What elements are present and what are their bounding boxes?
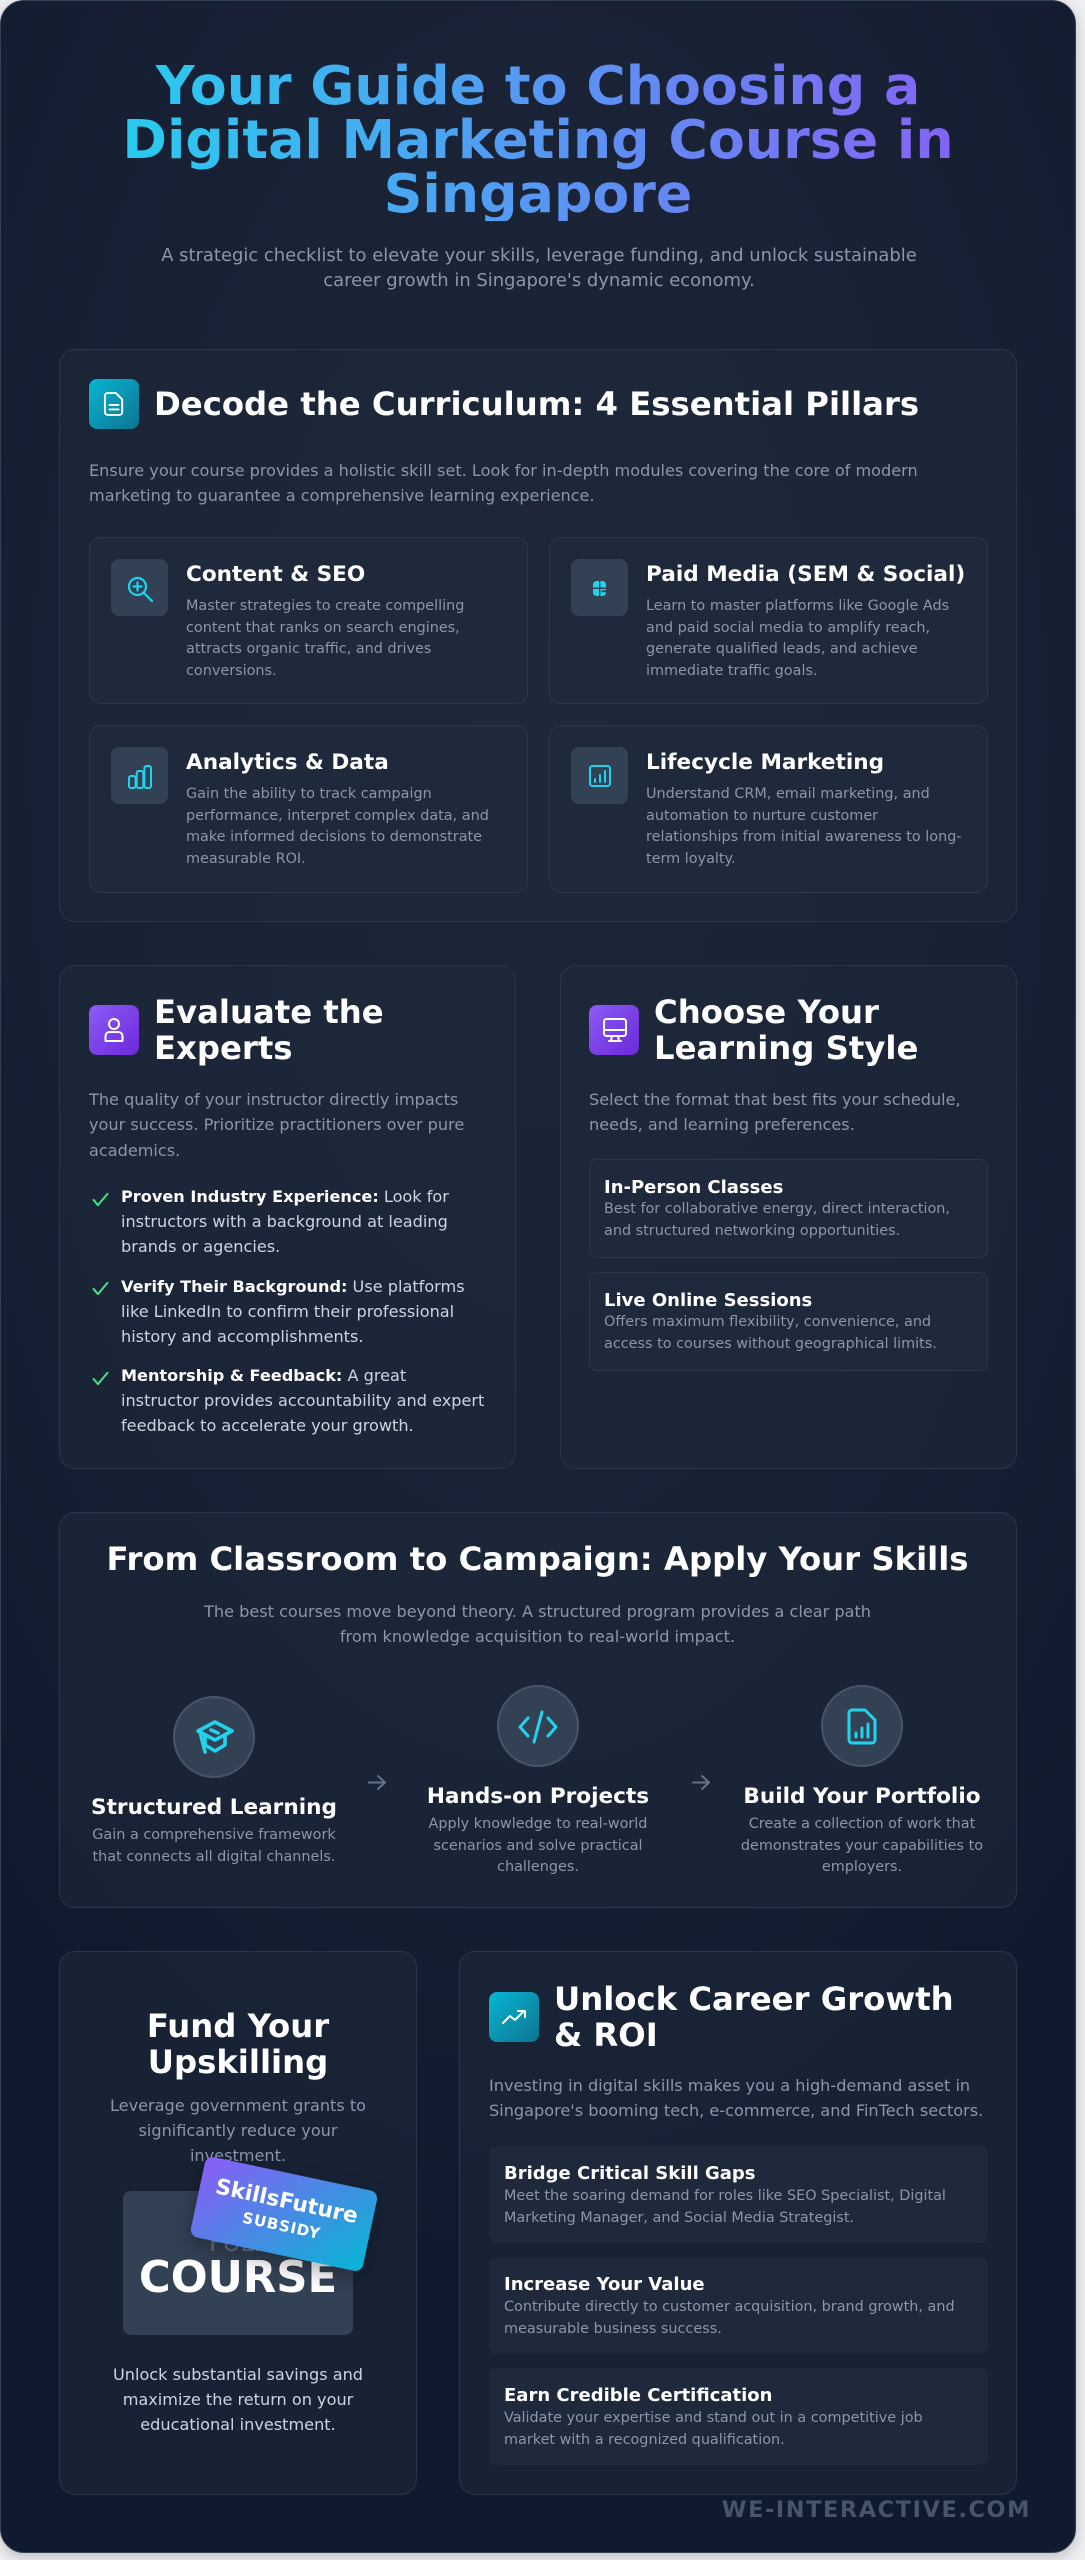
card text: earn credible certification: Validate your expertise and stand out in a competitive job xyxy=(504,2410,923,2426)
card text: analytics and data: measurable ROI. xyxy=(186,851,306,867)
card: earn credible certification xyxy=(489,2368,988,2465)
item: mentorship xyxy=(121,1366,484,1435)
item: verify background: history and accomplishments. xyxy=(121,1327,364,1346)
card text: paid media: generate qualified leads, and achieve xyxy=(646,641,918,657)
title: Your Guide to Choosing a xyxy=(156,54,920,117)
heading: career growth: & ROI xyxy=(554,2016,658,2054)
label: course: COURSE xyxy=(139,2253,337,2303)
text: funding outro: educational investment. xyxy=(140,2415,336,2434)
card text: live online sessions xyxy=(604,1314,937,1352)
icon: graduation cap xyxy=(173,1696,255,1778)
card text: bridge skill gaps xyxy=(504,2188,946,2226)
checklist: expert criteria xyxy=(92,1187,484,1435)
panel: learning style xyxy=(560,965,1017,1469)
card title: paid media: Paid Media (SEM & Social) xyxy=(646,562,965,587)
text: funding intro: significantly reduce your xyxy=(138,2121,338,2140)
text: career intro xyxy=(489,2076,983,2120)
text: funding intro: Leverage government grants to xyxy=(110,2096,366,2115)
step text xyxy=(741,1816,983,1875)
text: funding outro xyxy=(113,2365,363,2434)
icon: code xyxy=(497,1685,579,1767)
text: learning style intro: needs, and learning preferences. xyxy=(589,1115,855,1134)
text: learning style intro: Select the format that best fits your schedule, xyxy=(589,1090,961,1109)
card text: content and SEO: Master strategies to create compelling xyxy=(186,598,464,614)
text: experts intro: your success. Prioritize practitioners over pure xyxy=(89,1115,464,1134)
item: proven experience: brands or agencies. xyxy=(121,1237,280,1256)
icon: search plus xyxy=(111,559,168,616)
title: Digital Marketing Course in xyxy=(122,108,954,171)
step text: demonstrates your capabilities to xyxy=(741,1838,983,1854)
heading: career growth xyxy=(554,1980,954,2054)
item: proven experience: instructors with a background at leading xyxy=(121,1212,448,1231)
card text: lifecycle marketing xyxy=(646,786,962,867)
card text: in-person classes: Best for collaborative energy, direct interaction, xyxy=(604,1201,950,1217)
text: learning style intro xyxy=(589,1090,961,1134)
card title: lifecycle marketing: Lifecycle Marketing xyxy=(646,750,884,775)
card: analytics and data xyxy=(89,725,528,893)
heading: learning style: Choose Your xyxy=(654,993,879,1031)
text: experts intro: The quality of your instructor directly impacts xyxy=(89,1090,458,1109)
text: curriculum intro: Ensure your course provides a holistic skill set. Look for in-depth modules covering the core of modern xyxy=(89,461,918,480)
card text: increase your value: measurable business success. xyxy=(504,2321,722,2337)
arrow: step one to two xyxy=(368,1775,386,1790)
card text: live online sessions: Offers maximum flexibility, convenience, and xyxy=(604,1314,931,1330)
step title: Build Your Portfolio xyxy=(743,1784,981,1809)
card title: increase your value: Increase Your Value xyxy=(504,2274,705,2295)
card text: increase your value: Contribute directly to customer acquisition, brand growth, and xyxy=(504,2299,955,2315)
panel: evaluate the experts xyxy=(59,965,516,1469)
check: verify background xyxy=(92,1282,108,1296)
card: live online sessions xyxy=(589,1272,988,1371)
icon: bars xyxy=(111,747,168,804)
card text: analytics and data xyxy=(186,786,489,867)
card text: paid media xyxy=(646,598,949,679)
panel: curriculum pillars xyxy=(59,349,1017,922)
step text xyxy=(92,1827,336,1865)
text: funding outro: Unlock substantial savings and xyxy=(113,2365,363,2384)
subtitle: career growth in Singapore's dynamic economy. xyxy=(323,270,755,291)
text: funding intro xyxy=(110,2096,366,2165)
card text: lifecycle marketing: relationships from initial awareness to long- xyxy=(646,829,962,845)
title: Singapore xyxy=(384,162,692,225)
text: apply intro: from knowledge acquisition to real-world impact. xyxy=(340,1627,735,1646)
item: proven experience xyxy=(121,1187,449,1256)
text: funding intro: investment. xyxy=(190,2146,286,2165)
badge subtitle: SUBSIDY xyxy=(241,2209,322,2243)
item: verify background: Verify Their Background: Use platforms xyxy=(121,1277,465,1296)
heading: evaluate the experts: Experts xyxy=(154,1029,293,1067)
icon: trending up xyxy=(489,1992,539,2042)
text: experts intro: academics. xyxy=(89,1141,180,1160)
card text: bridge skill gaps: Marketing Manager, and Social Media Strategist. xyxy=(504,2210,854,2226)
badge title: SkillsFuture xyxy=(213,2174,360,2229)
card: content and SEO xyxy=(89,537,528,704)
text: funding outro: maximize the return on your xyxy=(123,2390,353,2409)
heading: decode the curriculum: Decode the Curriculum: 4 Essential Pillars xyxy=(154,385,919,423)
card title: content and SEO: Content & SEO xyxy=(186,562,365,587)
card text: earn credible certification: market with a recognized qualification. xyxy=(504,2432,785,2448)
icon: monitor xyxy=(589,1005,639,1055)
text: career intro: Singapore's booming tech, e-commerce, and FinTech sectors. xyxy=(489,2101,983,2120)
panel: fund your upskilling xyxy=(59,1951,417,2495)
text: apply intro xyxy=(204,1602,871,1646)
step text: scenarios and solve practical xyxy=(433,1838,643,1854)
card text: lifecycle marketing: term loyalty. xyxy=(646,851,736,867)
label: full: FULL xyxy=(209,2229,267,2257)
text: career intro: Investing in digital skills makes you a high-demand asset in xyxy=(489,2076,970,2095)
card title: live online sessions: Live Online Sessions xyxy=(604,1290,812,1311)
item: mentorship: feedback to accelerate your growth. xyxy=(121,1416,414,1435)
card text: content and SEO: conversions. xyxy=(186,663,277,679)
subsidy badge xyxy=(189,2156,379,2272)
step text: Gain a comprehensive framework xyxy=(92,1827,336,1843)
card text: lifecycle marketing: Understand CRM, email marketing, and xyxy=(646,786,930,802)
item: verify background xyxy=(121,1277,465,1346)
step text: challenges. xyxy=(497,1859,579,1875)
card text: analytics and data: performance, interpret complex data, and xyxy=(186,808,489,824)
heading: career growth: Unlock Career Growth xyxy=(554,1980,954,2018)
card text: bridge skill gaps: Meet the soaring demand for roles like SEO Specialist, Digital xyxy=(504,2188,946,2204)
check: mentorship xyxy=(92,1372,108,1386)
watermark: WE-INTERACTIVE.COM xyxy=(722,2497,1031,2523)
heading: fund your upskilling xyxy=(147,2007,330,2081)
icon: document xyxy=(89,379,139,429)
card text: content and SEO: content that ranks on search engines, xyxy=(186,620,460,636)
icon: paid media xyxy=(571,559,628,616)
text: curriculum intro: marketing to guarantee a comprehensive learning experience. xyxy=(89,486,595,505)
icon: file chart xyxy=(821,1685,903,1767)
step: hands-on projects xyxy=(427,1685,649,1875)
heading: evaluate the experts: Evaluate the xyxy=(154,993,384,1031)
card text: content and SEO: attracts organic traffic, and drives xyxy=(186,641,431,657)
card: paid media xyxy=(549,537,988,704)
card text: paid media: and paid social media to amplify reach, xyxy=(646,620,930,636)
course box xyxy=(123,2191,353,2335)
icon: chart square xyxy=(571,747,628,804)
card title: bridge skill gaps: Bridge Critical Skill Gaps xyxy=(504,2163,756,2184)
card: bridge skill gaps xyxy=(489,2146,988,2243)
card title: earn credible certification: Earn Credible Certification xyxy=(504,2385,772,2406)
step text xyxy=(428,1816,647,1875)
title xyxy=(60,59,1016,221)
step text: employers. xyxy=(822,1859,902,1875)
card text: increase your value xyxy=(504,2299,955,2337)
heading: fund your upskilling: Upskilling xyxy=(148,2043,328,2081)
card text: earn credible certification xyxy=(504,2410,923,2448)
panel: career growth and ROI xyxy=(459,1951,1017,2495)
item: verify background: like LinkedIn to confirm their professional xyxy=(121,1302,454,1321)
card title: analytics and data: Analytics & Data xyxy=(186,750,389,775)
check: proven experience xyxy=(92,1192,108,1206)
item: proven experience: Proven Industry Experience: Look for xyxy=(121,1187,449,1206)
arrow: step two to three xyxy=(692,1775,710,1790)
heading: fund your upskilling: Fund Your xyxy=(147,2007,329,2045)
card text: in-person classes xyxy=(604,1201,950,1239)
text: curriculum intro xyxy=(89,461,918,505)
card: in-person classes xyxy=(589,1159,988,1258)
card text: paid media: Learn to master platforms like Google Ads xyxy=(646,598,949,614)
step: structured learning xyxy=(91,1696,337,1865)
subtitle xyxy=(161,245,917,291)
card title: in-person classes: In-Person Classes xyxy=(604,1177,783,1198)
step: build your portfolio xyxy=(741,1685,983,1875)
graphic: course price with subsidy badge xyxy=(123,2157,378,2335)
heading: learning style: Learning Style xyxy=(654,1029,918,1067)
heading: evaluate the experts xyxy=(154,993,384,1067)
card text: in-person classes: and structured networking opportunities. xyxy=(604,1223,900,1239)
heading: learning style xyxy=(654,993,918,1067)
step title: Hands-on Projects xyxy=(427,1784,649,1809)
item: mentorship: Mentorship & Feedback: A great xyxy=(121,1366,406,1385)
step text: Create a collection of work that xyxy=(749,1816,975,1832)
text: apply intro: The best courses move beyond theory. A structured program provides a clear path xyxy=(204,1602,871,1621)
heading: classroom to campaign: From Classroom to Campaign: Apply Your Skills xyxy=(106,1540,969,1578)
card text: live online sessions: access to courses without geographical limits. xyxy=(604,1336,937,1352)
card text: analytics and data: Gain the ability to track campaign xyxy=(186,786,432,802)
text: experts intro xyxy=(88,1090,464,1160)
card text: lifecycle marketing: automation to nurture customer xyxy=(646,808,878,824)
icon: person xyxy=(89,1005,139,1055)
card text: analytics and data: make informed decisions to demonstrate xyxy=(186,829,482,845)
subtitle: A strategic checklist to elevate your skills, leverage funding, and unlock sustainable xyxy=(161,245,917,266)
card text: content and SEO xyxy=(186,598,464,679)
step text: that connects all digital channels. xyxy=(93,1849,335,1865)
card: lifecycle marketing xyxy=(549,725,988,893)
card text: paid media: immediate traffic goals. xyxy=(646,663,818,679)
panel: apply your skills xyxy=(59,1512,1017,1908)
item: mentorship: instructor provides accountability and expert xyxy=(121,1391,484,1410)
step title: Structured Learning xyxy=(91,1795,337,1820)
step text: Apply knowledge to real-world xyxy=(429,1816,647,1832)
card: increase your value xyxy=(489,2257,988,2354)
